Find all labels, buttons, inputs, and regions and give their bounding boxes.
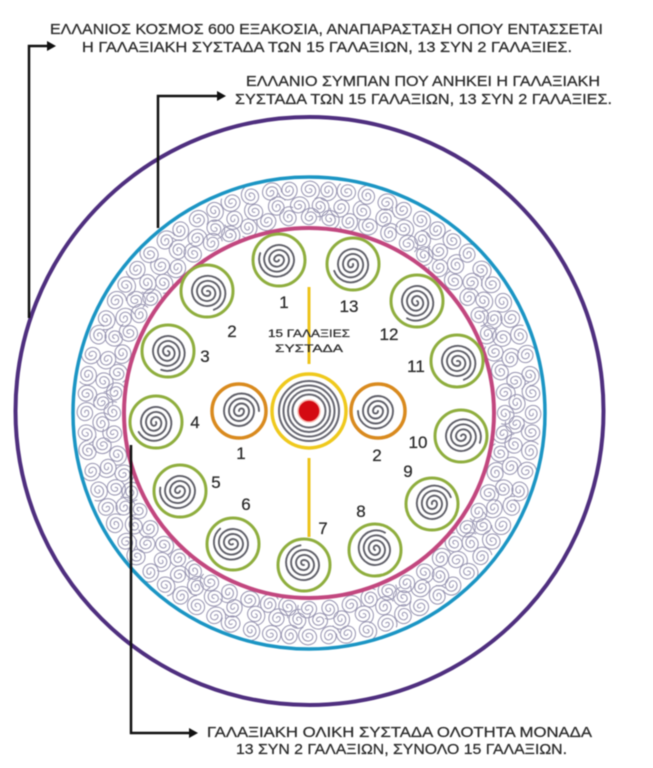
swirl band bbox=[51, 155, 567, 671]
callout text: galactic total: ΓΑΛΑΞΙΑΚΗ ΟΛΙΚΗ ΣΥΣΤΑΔΑ ΟΛΟΤΗΤΑ ΜΟΝΑΔΑ bbox=[207, 724, 592, 741]
outer circle: Hellenic universe bbox=[16, 117, 604, 705]
galaxy numbers: 1 bbox=[236, 444, 246, 463]
galaxy 11 bbox=[431, 335, 483, 387]
galaxy numbers: 6 bbox=[241, 495, 251, 514]
galaxy 1 bbox=[253, 234, 305, 286]
galaxy 5 bbox=[154, 465, 206, 517]
callout text: Hellenic cosmos: ΕΛΛΑΝΙΟΣ ΚΟΣΜΟΣ 600 ΕΞΑΚΟΣΙΑ, ΑΝΑΠΑΡΑΣΤΑΣΗ ΟΠΟΥ ΕΝΤΑΣΣΕΤΑΙ bbox=[50, 21, 603, 38]
blue circle bbox=[73, 177, 545, 649]
galaxy 10 bbox=[435, 410, 487, 462]
galaxy numbers: 11 bbox=[407, 357, 425, 376]
galaxy numbers: 7 bbox=[318, 519, 328, 538]
arrow: pink circle callout bbox=[131, 445, 190, 733]
galaxy 3 bbox=[142, 325, 194, 377]
galaxy numbers: 9 bbox=[403, 462, 413, 481]
orange galaxy 1 bbox=[212, 384, 266, 438]
galaxy numbers: 2 bbox=[372, 446, 382, 465]
galaxy 4 bbox=[130, 396, 182, 448]
galaxy numbers: 13 bbox=[340, 297, 358, 316]
orange galaxies bbox=[212, 384, 405, 438]
galaxy numbers bbox=[190, 293, 427, 538]
galaxy numbers: 1 bbox=[279, 293, 289, 312]
galaxy numbers: 2 bbox=[227, 322, 237, 341]
orange galaxy 2 bbox=[351, 384, 405, 438]
green galaxies 1 to 13 bbox=[130, 234, 487, 591]
galaxy numbers: 10 bbox=[409, 433, 427, 452]
yellow axis lines bbox=[308, 287, 310, 537]
galaxy numbers: 5 bbox=[211, 473, 221, 492]
central galaxy bbox=[272, 374, 346, 448]
arrow: blue ring callout bbox=[158, 96, 218, 228]
blue ring with swirl band bbox=[51, 155, 567, 671]
arrow: outer circle callout bbox=[29, 46, 49, 318]
galaxy numbers: 12 bbox=[380, 325, 398, 344]
callout text: Hellenic universe: ΣΥΣΤΑΔΑ ΤΩΝ 15 ΓΑΛΑΞΙΩΝ, 13 ΣΥΝ 2 ΓΑΛΑΞΙΕΣ. bbox=[235, 91, 612, 108]
galaxy numbers: 8 bbox=[356, 502, 366, 521]
callout text: Hellenic universe: ΕΛΛΑΝΙΟ ΣΥΜΠΑΝ ΠΟΥ ΑΝΗΚΕΙ Η ΓΑΛΑΞΙΑΚΗ bbox=[246, 73, 600, 90]
centre label: ΣΥΣΤΑΔΑ bbox=[275, 343, 344, 355]
galaxy 12 bbox=[391, 275, 443, 327]
galaxy numbers: 4 bbox=[190, 413, 200, 432]
callout text: Hellenic cosmos: Η ΓΑΛΑΞΙΑΚΗ ΣΥΣΤΑΔΑ ΤΩΝ 15 ΓΑΛΑΞΙΩΝ, 13 ΣΥΝ 2 ΓΑΛΑΞΙΕΣ. bbox=[82, 39, 572, 56]
galaxy 8 bbox=[349, 524, 401, 576]
callout text: galactic total: 13 ΣΥΝ 2 ΓΑΛΑΞΙΩΝ, ΣΥΝΟΛΟ 15 ΓΑΛΑΞΙΩΝ. bbox=[236, 741, 567, 758]
galaxy 9 bbox=[406, 478, 458, 530]
galaxy 6 bbox=[207, 518, 259, 570]
galaxy numbers: 3 bbox=[200, 347, 210, 366]
pink circle: galactic cluster boundary bbox=[124, 228, 494, 598]
galaxy 2 bbox=[181, 265, 233, 317]
red core bbox=[298, 400, 320, 422]
galaxy 7 bbox=[278, 539, 330, 591]
galaxy 13 bbox=[327, 238, 379, 290]
centre label: 15 ΓΑΛΑΞΙΕΣ bbox=[268, 328, 350, 340]
